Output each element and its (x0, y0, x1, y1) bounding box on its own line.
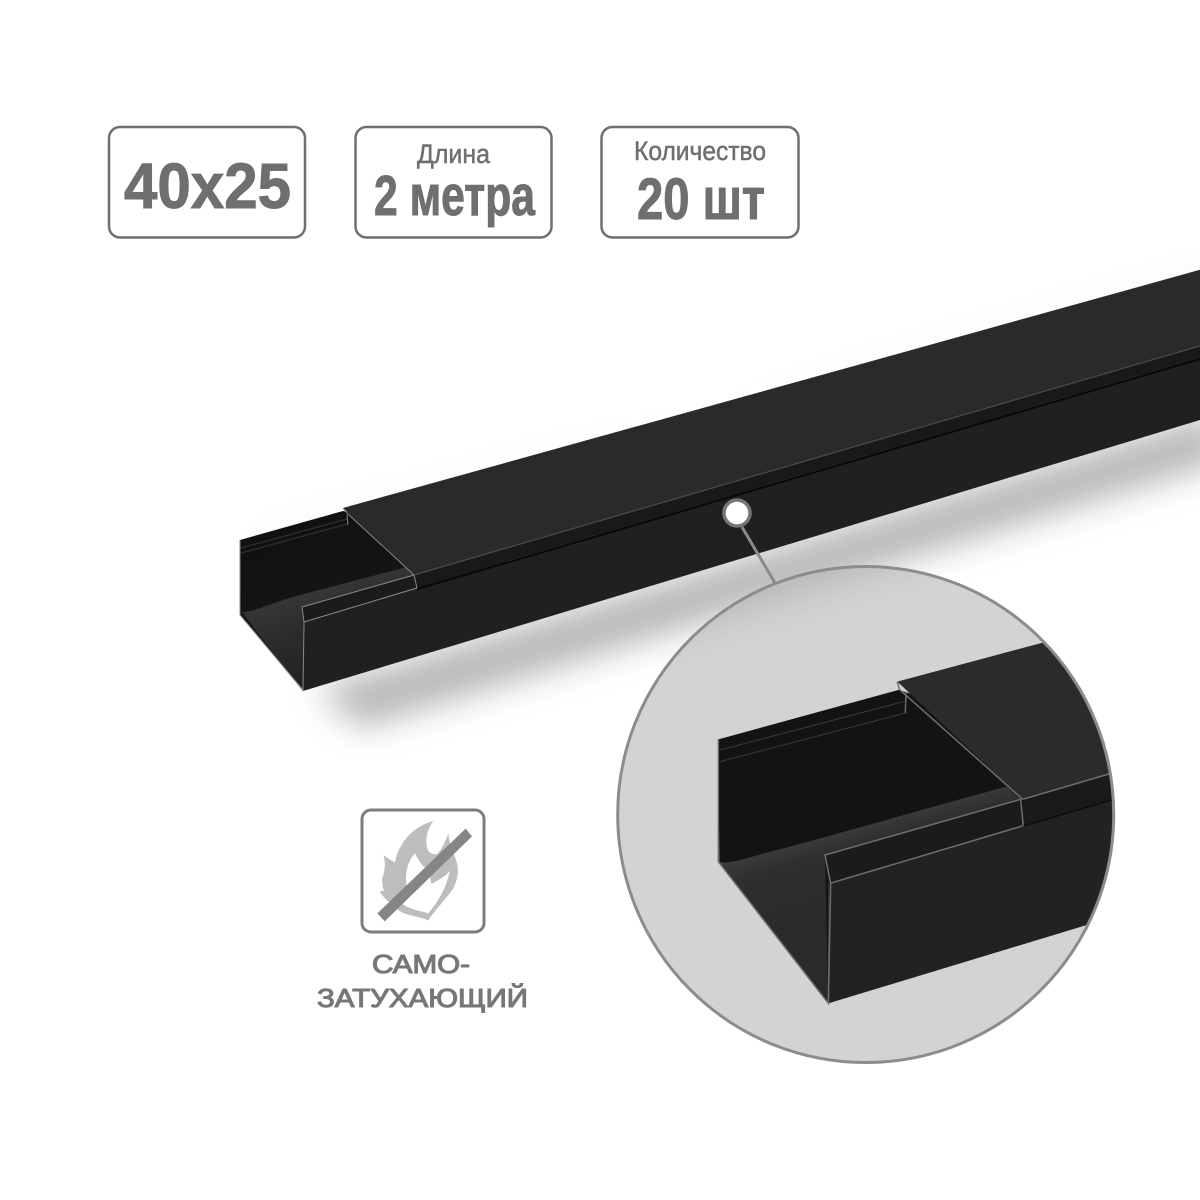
duct back rail grooves (241, 519, 347, 553)
duct lid seam shadow (417, 356, 1200, 589)
badge: quantity 20 pcs: Количество (634, 136, 766, 166)
enlarged lip (828, 822, 1022, 884)
self-extinguishing label: ЗАТУХАЮЩИЙ (317, 983, 528, 1013)
duct lip (302, 575, 417, 622)
badge: length 2 metres: 2 метра (374, 164, 536, 228)
cable duct product (240, 267, 1200, 691)
badge: length 2 metres (356, 127, 552, 238)
callout pointer (724, 500, 775, 583)
self-extinguishing label (317, 949, 528, 1013)
enlarged lid top (898, 642, 1109, 798)
badge: size 40x25 (109, 127, 305, 238)
enlarged lid front face (1024, 774, 1112, 826)
lid highlight line (414, 343, 1200, 575)
duct lid front face (414, 343, 1200, 588)
badge: quantity 20 pcs (602, 127, 798, 238)
zoom callout circle (616, 565, 1116, 1064)
duct highlight edges (240, 508, 417, 690)
enlarged duct (718, 642, 1112, 1006)
badge: size 40x25: 40x25 (124, 150, 291, 222)
enlarged side wall (828, 800, 1112, 1004)
self-extinguishing icon (362, 810, 484, 932)
enlarged rail grooves (720, 702, 907, 762)
duct interior back wall (240, 511, 430, 691)
strike-through bar (377, 829, 472, 921)
enlarged back wall (718, 690, 1030, 1003)
duct interior floor (242, 567, 416, 691)
duct shadow (240, 262, 1200, 728)
enlarged edges (718, 682, 1109, 1006)
self-extinguishing label: САМО- (372, 949, 470, 979)
enlarged seam (1023, 800, 1112, 826)
badge: quantity 20 pcs: 20 шт (637, 167, 765, 232)
enlarged floor (719, 787, 1021, 1003)
duct lid top (343, 267, 1200, 575)
flame (380, 821, 458, 920)
duct side wall (303, 355, 1200, 691)
badge: length 2 metres: Длина (417, 139, 491, 169)
